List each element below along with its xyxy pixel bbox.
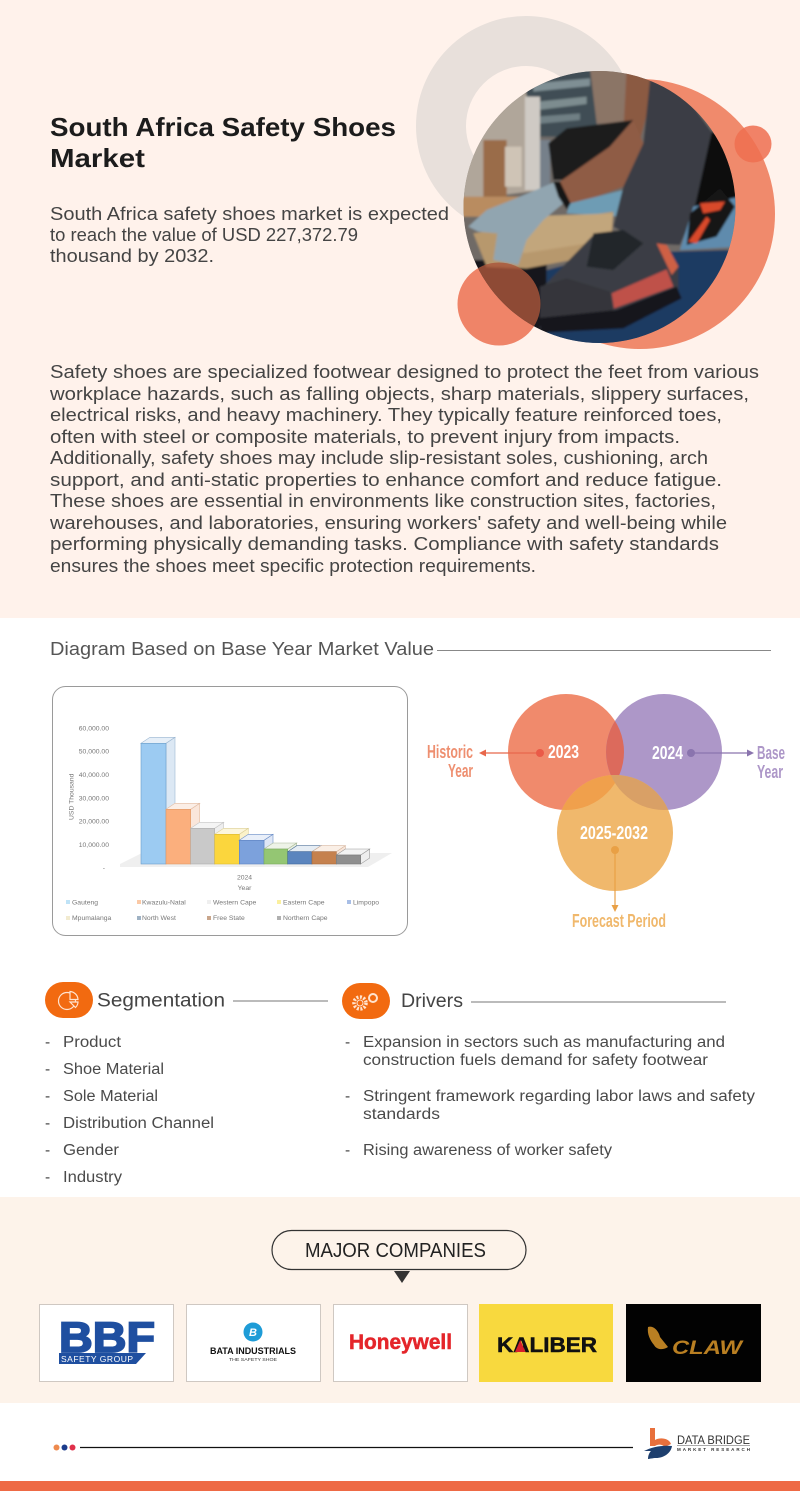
chart legend: Limpopo <box>353 900 379 906</box>
chart legend: Gauteng <box>72 900 98 906</box>
drivers list: Expansion in sectors such as manufacturing and <box>363 1034 725 1051</box>
logo: Bata Industrials: B <box>249 1327 257 1339</box>
logo: Kaliber: KALIBER <box>497 1334 597 1357</box>
drivers list: - <box>345 1088 350 1105</box>
y axis labels: 50,000.00 <box>79 748 109 756</box>
major companies heading: MAJOR COMPANIES <box>305 1240 486 1262</box>
description paragraph: support, and anti-static properties to enhance comfort and reduce fatigue. <box>50 469 722 490</box>
drivers list <box>345 1034 755 1159</box>
hero photo: worker with safety shoe <box>460 67 740 347</box>
icon: pie chart <box>45 982 93 1018</box>
y axis labels: 40,000.00 <box>79 772 109 779</box>
segmentation heading: Segmentation <box>97 990 225 1012</box>
bar chart panel <box>52 686 408 936</box>
logo: Data Bridge Market Research <box>644 1428 750 1459</box>
chart legend: Eastern Cape <box>283 900 325 906</box>
axis titles: Year <box>238 885 252 892</box>
logo: Claw <box>626 1304 761 1382</box>
y axis labels <box>68 726 109 872</box>
logo: BBF Safety Group: BBF <box>59 1314 155 1362</box>
small accent circles <box>478 126 772 326</box>
chart legend: North West <box>142 915 176 922</box>
drivers list: - <box>345 1034 350 1051</box>
y axis labels: 10,000.00 <box>79 842 109 849</box>
historic year callout: Year <box>448 761 473 781</box>
logo: BBF Safety Group <box>40 1304 174 1382</box>
y axis labels: USD Thousand <box>68 773 76 820</box>
title: Market <box>50 143 145 173</box>
logo: Bata Industrials <box>186 1304 320 1382</box>
chart legend: Free State <box>213 915 245 922</box>
logo: Data Bridge Market Research: MARKET RESEARCH <box>677 1447 750 1452</box>
logo: BBF Safety Group: SAFETY GROUP <box>61 1354 133 1364</box>
chart legend: Northern Cape <box>283 915 328 922</box>
drivers heading <box>342 983 726 1019</box>
description paragraph: often with steel or composite materials, to prevent injury from impacts. <box>50 426 680 447</box>
logo: Kaliber <box>479 1304 613 1382</box>
description paragraph: performing physically demanding tasks. Compliance with safety standards <box>50 533 719 554</box>
description paragraph: workplace hazards, such as falling objects, sharp materials, slippery surfaces, <box>49 383 749 404</box>
y axis labels: - <box>103 865 105 872</box>
historic year callout: 2023 <box>548 742 579 762</box>
segmentation list: Sole Material <box>63 1088 158 1105</box>
segmentation list: Shoe Material <box>63 1061 164 1078</box>
base year callout: Year <box>757 762 783 782</box>
axis titles <box>237 874 252 892</box>
segmentation list: Distribution Channel <box>63 1115 214 1132</box>
decorative hero circles <box>441 41 775 349</box>
diagram heading: Diagram Based on Base Year Market Value <box>50 639 434 659</box>
title: South Africa Safety Shoes <box>50 112 396 142</box>
segmentation list: - <box>45 1034 50 1051</box>
drivers list: Stringent framework regarding labor laws and safety <box>363 1088 755 1105</box>
description paragraph: ensures the shoes meet specific protection requirements. <box>50 555 536 576</box>
base year callout: Base <box>757 743 785 763</box>
y axis labels: 20,000.00 <box>79 818 109 826</box>
base year callout: 2024 <box>652 743 683 763</box>
drivers list: construction fuels demand for safety footwear <box>363 1052 708 1069</box>
segmentation list: - <box>45 1088 50 1105</box>
description paragraph: Additionally, safety shoes may include slip-resistant soles, cushioning, arch <box>50 447 708 468</box>
major companies heading <box>272 1230 526 1283</box>
logo: Claw: CLAW <box>672 1338 745 1359</box>
segmentation list: Product <box>63 1034 122 1051</box>
drivers list: Rising awareness of worker safety <box>363 1142 612 1159</box>
intro text: South Africa safety shoes market is expected <box>50 203 449 224</box>
title <box>50 112 396 173</box>
logo: Honeywell: Honeywell <box>349 1331 452 1354</box>
y axis labels: 30,000.00 <box>79 796 109 802</box>
logo: Honeywell <box>334 1304 468 1382</box>
chart legend: Mpumalanga <box>72 915 112 922</box>
segmentation list: - <box>45 1115 50 1132</box>
segmentation list: - <box>45 1169 50 1186</box>
chart legend: Kwazulu-Natal <box>142 900 186 906</box>
icon: gears <box>342 983 390 1019</box>
segmentation list: Gender <box>63 1142 119 1159</box>
description paragraph: These shoes are essential in environments like construction sites, factories, <box>50 490 716 511</box>
drivers list: - <box>345 1142 350 1159</box>
chart legend: Western Cape <box>213 900 257 906</box>
segmentation list <box>45 1034 214 1186</box>
venn circles <box>508 694 722 891</box>
forecast period callout <box>572 823 666 931</box>
intro text: thousand by 2032. <box>50 245 214 266</box>
axis titles: 2024 <box>237 874 252 882</box>
intro text <box>50 203 449 266</box>
segmentation list: Industry <box>63 1169 122 1186</box>
drivers heading: Drivers <box>401 991 463 1012</box>
segmentation heading <box>45 982 328 1018</box>
logo: Bata Industrials: THE SAFETY SHOE <box>229 1357 277 1362</box>
forecast period callout: Forecast Period <box>572 911 666 931</box>
footer bar <box>0 1481 800 1491</box>
segmentation list: - <box>45 1061 50 1078</box>
footer rule with dots <box>54 1444 633 1450</box>
description paragraph: Safety shoes are specialized footwear designed to protect the feet from various <box>50 361 759 382</box>
description paragraph <box>49 361 759 576</box>
description paragraph: warehouses, and laboratories, ensuring workers' safety and well-being while <box>49 512 727 533</box>
base year callout <box>652 743 785 782</box>
intro text: to reach the value of USD 227,372.79 <box>50 224 358 245</box>
chart legend <box>66 900 379 922</box>
y axis labels: 60,000.00 <box>79 726 109 732</box>
bars <box>141 737 370 864</box>
venn diagram of periods <box>427 694 785 931</box>
historic year callout: Historic <box>427 742 473 762</box>
description paragraph: electrical risks, and heavy machinery. They typically feature reinforced toes, <box>50 404 722 425</box>
historic year callout <box>427 742 579 781</box>
segmentation list: - <box>45 1142 50 1159</box>
logo: Data Bridge Market Research: DATA BRIDGE <box>677 1435 750 1447</box>
forecast period callout: 2025-2032 <box>580 823 648 843</box>
logo: Bata Industrials: BATA INDUSTRIALS <box>210 1346 296 1356</box>
drivers list: standards <box>363 1106 440 1123</box>
